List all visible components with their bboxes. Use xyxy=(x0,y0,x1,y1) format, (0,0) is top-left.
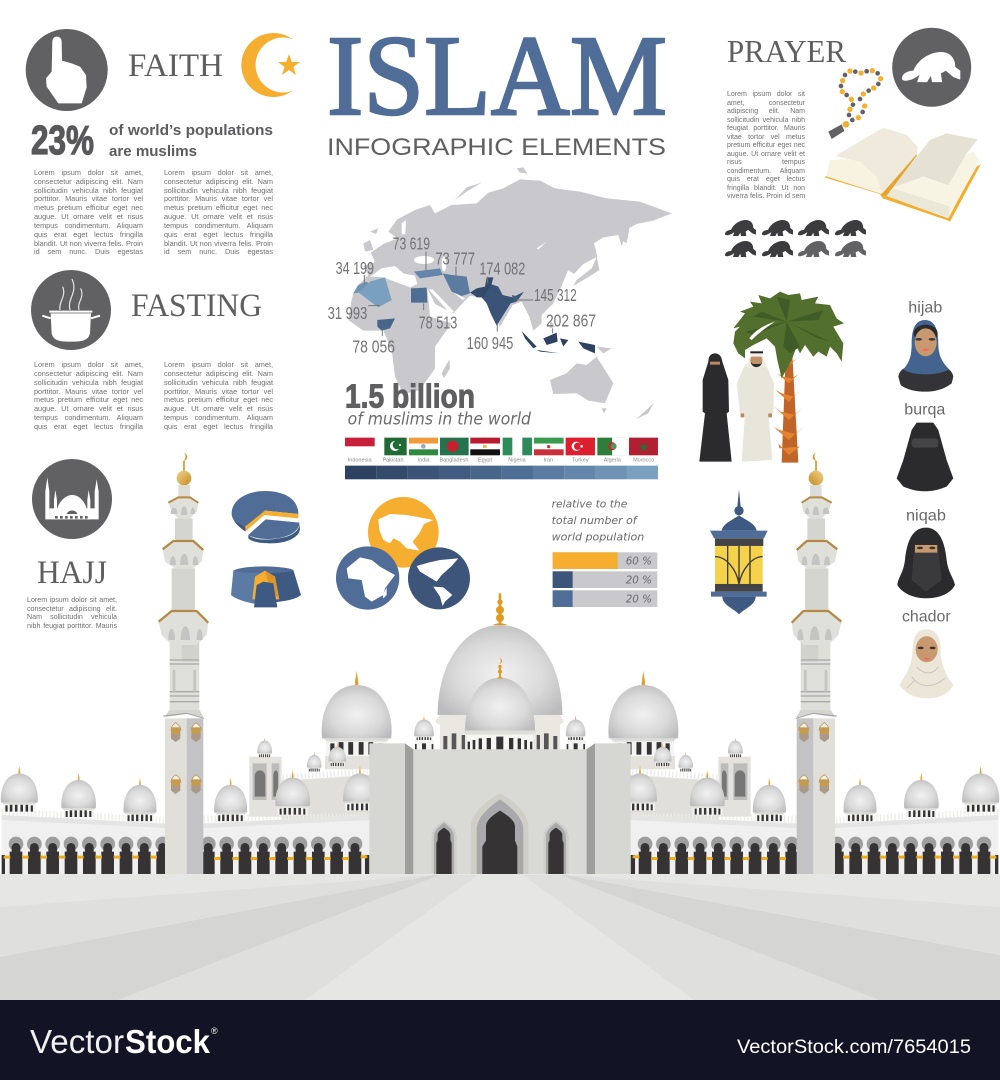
front dome finial xyxy=(497,657,503,678)
icon: prayer beads xyxy=(828,68,883,139)
text: faith column 2: id sem nunc. Duis egestas xyxy=(164,247,273,256)
flag labels: Bangladesh xyxy=(439,457,468,463)
hajj title: HAJJ xyxy=(37,555,107,591)
text: faith column 1: id sem nunc. Duis egestas xyxy=(34,247,143,256)
text: faith column 1 xyxy=(34,168,143,256)
stat caption: of muslims in the world xyxy=(348,409,531,428)
text: faith column 2: augue. Ut ornare velit et risus xyxy=(164,212,273,221)
country numbers: 78 513 xyxy=(419,312,457,332)
text: hajj: Nam sollicitudin vehicula xyxy=(27,613,117,621)
logo: VectorStock: Stock xyxy=(125,1023,211,1060)
rear court wall xyxy=(282,775,370,820)
ground: courtyard xyxy=(0,874,1000,1000)
footer url: VectorStock.com/7654015 xyxy=(737,1037,971,1058)
text: prayer xyxy=(727,90,805,200)
mosque: centre block xyxy=(369,583,631,874)
text: prayer: adipiscing elit. Nam xyxy=(727,108,805,115)
front dome xyxy=(465,678,535,731)
country numbers xyxy=(328,233,596,357)
text: fasting column 1: augue. Ut ornare velit et risus xyxy=(34,404,143,413)
country numbers: 73 619 xyxy=(393,233,430,253)
lantern xyxy=(710,489,768,614)
text: faith column 1: tempus condimentum. Aliquam xyxy=(34,221,143,230)
stat caption xyxy=(109,123,273,160)
caption: relative to world population: world population xyxy=(552,530,645,543)
text: prayer: pretium efficitur eget nec xyxy=(727,142,805,149)
text: prayer: feugiat porttitor. Mauris xyxy=(727,125,805,132)
label: niqab: niqab xyxy=(906,508,946,525)
logo: VectorStock xyxy=(30,1023,218,1060)
legend colour scale xyxy=(345,466,658,479)
side dome xyxy=(322,671,392,756)
main dome finial xyxy=(493,583,507,625)
icon: Eurasia xyxy=(368,497,439,568)
right arch door xyxy=(544,820,569,874)
panel: faith heading xyxy=(26,29,300,163)
charts: pie and kaaba xyxy=(231,491,657,610)
text: hajj: Lorem ipsum dolor sit amet, xyxy=(27,596,117,604)
footer band xyxy=(0,1000,1000,1080)
palm tree xyxy=(733,292,844,463)
minaret upper xyxy=(159,453,208,645)
text: fasting column 1: Lorem ipsum dolor sit amet, xyxy=(34,360,143,369)
flag labels: Pakistan xyxy=(382,457,404,463)
text: faith column 1: consectetur adipiscing elit. Nam xyxy=(34,177,143,186)
courtyard domes xyxy=(1,766,38,812)
panel: hajj heading xyxy=(32,459,112,591)
text: fasting column 2: sollicitudin vehicula nibh feugiat xyxy=(164,378,273,387)
mosque xyxy=(1,453,999,874)
text: prayer: Lorem ipsum dolor sit xyxy=(727,91,805,98)
icon: Americas xyxy=(408,547,470,609)
icon: 3D pie chart xyxy=(232,491,300,543)
turret domes xyxy=(414,715,434,741)
caption: relative to world population: relative to the xyxy=(552,497,628,510)
text: faith column 1: metus pretium efficitur eget nec xyxy=(34,203,143,212)
country numbers: 202 867 xyxy=(546,311,596,331)
country numbers: 78 056 xyxy=(352,337,395,357)
stat caption: are muslims xyxy=(109,144,197,160)
bar chart: population shares: 20 % xyxy=(626,575,652,587)
world regions circles xyxy=(336,497,470,610)
caption: relative to world population xyxy=(552,497,645,543)
text: faith column 2: metus pretium efficitur eget nec xyxy=(164,203,273,212)
icon: mosque in circle xyxy=(32,459,112,539)
seas xyxy=(370,220,547,313)
text: fasting column 2: consectetur adipiscing elit. Nam xyxy=(164,369,273,378)
text: fasting column 1: sollicitudin vehicula nibh feugiat xyxy=(34,378,143,387)
text: fasting column 1: quis erat eget lectus fringilla xyxy=(34,422,143,431)
arcade walls xyxy=(2,815,370,874)
bar chart: population shares: 60 % xyxy=(626,556,652,568)
figure: chador xyxy=(899,629,953,698)
icon: cooking pot xyxy=(31,270,111,350)
flag labels xyxy=(348,457,654,463)
flag labels: Indonesia xyxy=(348,457,372,463)
flag labels: Algeria xyxy=(604,457,622,463)
icon: prostrating figure xyxy=(892,28,971,107)
mosque: left wing xyxy=(1,453,392,874)
text: fasting column 1: porttitor. Mauris vitae tortor vel xyxy=(34,387,143,396)
text: prayer: fringilla blandit. Ut non xyxy=(727,185,805,192)
text: prayer: sollicitudin vehicula nibh xyxy=(727,117,805,124)
text: fasting column 2: augue. Ut ornare velit et risus xyxy=(164,404,273,413)
country numbers: 160 945 xyxy=(467,333,513,353)
stat: 1.5 billion: 1.5 billion xyxy=(345,378,475,415)
text: prayer: risus tempus xyxy=(727,159,805,166)
label: chador: chador xyxy=(902,608,951,625)
text: faith column 2: quis erat eget lectus fringilla xyxy=(164,230,273,239)
icon: crescent and star xyxy=(241,33,300,97)
text: fasting column 1: consectetur adipiscing elit. Nam xyxy=(34,369,143,378)
text: fasting column 2: Lorem ipsum dolor sit amet, xyxy=(164,360,273,369)
text: prayer: viverra felis. Proin id sem xyxy=(727,193,805,200)
country numbers: 73 777 xyxy=(435,248,475,268)
pavilion tower xyxy=(249,757,282,817)
text: fasting column 1: tempus condimentum. Aliquam xyxy=(34,413,143,422)
icon: Africa xyxy=(336,546,399,610)
flag labels: Turkey xyxy=(572,457,589,463)
icon: open book xyxy=(824,128,981,222)
subtitle: INFOGRAPHIC ELEMENTS xyxy=(327,134,666,161)
label: burqa: burqa xyxy=(904,401,946,418)
text: faith column 2: consectetur adipiscing elit. Nam xyxy=(164,177,273,186)
bar chart: population shares: 20 % xyxy=(626,594,652,606)
flag labels: Nigeria xyxy=(508,457,527,463)
stat: 23%: 23% xyxy=(31,117,94,163)
panel: fasting heading xyxy=(31,270,262,350)
title: ISLAM xyxy=(327,12,667,139)
main dome xyxy=(438,625,562,715)
logo: VectorStock: ® xyxy=(211,1026,218,1036)
balustrade xyxy=(2,772,369,821)
icon: raised finger xyxy=(26,29,108,111)
text: hajj: nibh feugiat porttitor. Mauris xyxy=(27,622,117,630)
text: fasting column 1: metus pretium efficitur eget nec xyxy=(34,395,143,404)
panel: prayer heading xyxy=(725,28,981,257)
side towers xyxy=(369,743,413,874)
figure: burqa xyxy=(897,423,953,491)
text: faith column 1: quis erat eget lectus fringilla xyxy=(34,230,143,239)
text: fasting column 1 xyxy=(34,360,143,431)
text: fasting column 2 xyxy=(164,360,273,431)
caption: relative to world population: total number of xyxy=(552,514,639,527)
text: fasting column 2: metus pretium efficitur eget nec xyxy=(164,395,273,404)
icon row: prayer count xyxy=(725,220,866,257)
land xyxy=(348,167,672,419)
text: faith column 2 xyxy=(164,168,273,256)
text: faith column 2: sollicitudin vehicula nibh feugiat xyxy=(164,186,273,195)
text: fasting column 2: tempus condimentum. Aliquam xyxy=(164,413,273,422)
text: faith column 2: blandit. Ut non viverra felis. Proin xyxy=(164,238,273,248)
people and palm tree xyxy=(699,292,955,698)
text: faith column 1: sollicitudin vehicula nibh feugiat xyxy=(34,186,143,195)
main arch door xyxy=(471,793,528,874)
text: prayer: augue. Ut ornare velit et xyxy=(727,151,805,158)
text: faith column 2: porttitor. Mauris vitae tortor vel xyxy=(164,194,273,203)
text: faith column 2: Lorem ipsum dolor sit amet, xyxy=(164,168,273,177)
dome drum xyxy=(435,715,564,749)
text: faith column 1: Lorem ipsum dolor sit amet, xyxy=(34,168,143,177)
text: hajj xyxy=(27,596,117,630)
faith title: FAITH xyxy=(128,48,223,84)
text: faith column 1: augue. Ut ornare velit et risus xyxy=(34,212,143,221)
text: fasting column 2: quis erat eget lectus fringilla xyxy=(164,422,273,431)
text: hajj: consectetur adipiscing elit. xyxy=(27,605,117,613)
flags xyxy=(345,438,658,455)
bar chart: population shares xyxy=(553,552,657,607)
left arch door xyxy=(432,820,457,874)
text: faith column 1: porttitor. Mauris vitae tortor vel xyxy=(34,194,143,203)
leader lines xyxy=(364,252,553,336)
man in white robe xyxy=(737,351,774,462)
arcade columns xyxy=(2,837,369,874)
country numbers: 31 993 xyxy=(328,303,367,323)
text: prayer: amet, consectetur xyxy=(727,100,805,107)
label: hijab: hijab xyxy=(908,299,943,316)
text: fasting column 2: porttitor. Mauris vitae tortor vel xyxy=(164,387,273,396)
figure: hijab xyxy=(898,320,953,392)
text: faith column 2: tempus condimentum. Aliquam xyxy=(164,221,273,230)
mosque: right wing xyxy=(608,453,999,874)
small rear domes xyxy=(329,743,346,767)
highlighted countries xyxy=(353,268,595,353)
flag labels: Egypt xyxy=(478,457,492,463)
figure: niqab xyxy=(897,528,955,598)
map: muslim populations xyxy=(328,167,672,479)
logo: VectorStock: Vector xyxy=(30,1023,124,1060)
prayer title: PRAYER xyxy=(727,33,847,69)
flag labels: Iran xyxy=(544,457,553,463)
country numbers: 145 312 xyxy=(534,285,577,305)
stat caption: of world’s populations xyxy=(109,123,273,139)
flag labels: India xyxy=(418,457,431,463)
main wall xyxy=(413,749,587,874)
text: prayer: quis erat eget lectus xyxy=(727,176,805,183)
country numbers: 174 082 xyxy=(479,258,525,278)
text: prayer: vitae tortor vel metus xyxy=(727,134,805,141)
flag labels: Morocco xyxy=(633,457,654,463)
text: faith column 1: blandit. Ut non viverra felis. Proin xyxy=(34,238,143,248)
woman in black robe xyxy=(699,353,732,462)
fasting title: FASTING xyxy=(131,288,262,324)
text: prayer: condimentum. Aliquam xyxy=(727,168,805,175)
country numbers: 34 199 xyxy=(336,258,374,278)
minaret xyxy=(163,640,204,874)
icon: kaaba shape xyxy=(231,566,301,607)
